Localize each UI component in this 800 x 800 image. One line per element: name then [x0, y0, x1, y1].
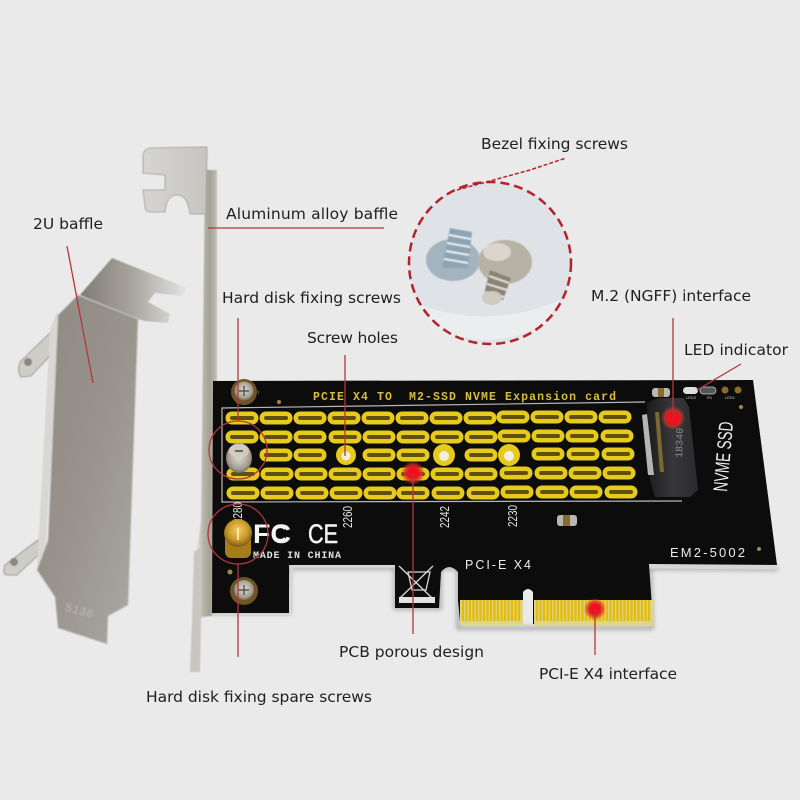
- M.2 connector: 18340: [675, 428, 687, 458]
- recycling icon: [399, 566, 435, 603]
- callout rings: [208, 421, 268, 564]
- board labels: NVME SSD: [710, 421, 738, 492]
- size markings: [230, 502, 520, 528]
- label: Hard disk fixing screws: Hard disk fixing screws: [222, 289, 401, 307]
- label: M.2 (NGFF) interface: M.2 (NGFF) interface: [591, 287, 751, 305]
- vertical bar: [197, 170, 217, 618]
- zoomed bezel fixing screws circle: [409, 158, 571, 344]
- size markings: 2242: [437, 506, 452, 528]
- size markings: 2230: [505, 505, 520, 527]
- board edge highlight: [212, 566, 776, 615]
- certification marks: MADE IN CHINA: [253, 551, 341, 562]
- capacitors: [557, 388, 670, 526]
- label: Screw holes: Screw holes: [307, 329, 398, 347]
- LED components: [228, 386, 761, 574]
- label: Aluminum alloy baffle: Aluminum alloy baffle: [226, 205, 398, 223]
- board labels: LED2: [686, 395, 697, 400]
- board labels: [250, 390, 745, 589]
- dashed red ring: [409, 182, 571, 344]
- PCIe M.2 adapter board: [212, 379, 778, 628]
- circle backdrop: [409, 182, 571, 344]
- label: LED indicator: LED indicator: [684, 341, 789, 359]
- certification marks: FC: [253, 519, 291, 549]
- silver screw: [478, 240, 532, 305]
- bracket body: [37, 295, 138, 644]
- board labels: U48: [250, 584, 258, 589]
- M.2 connector: [642, 398, 698, 497]
- aluminum alloy baffle bracket: [143, 147, 217, 672]
- board labels: LED1: [725, 395, 736, 400]
- label: PCB porous design: PCB porous design: [339, 643, 484, 661]
- gold standoff: [224, 519, 252, 558]
- dashed leader: [457, 158, 566, 190]
- board labels: EM2-5002: [670, 545, 745, 560]
- bracket top flap: [80, 258, 187, 323]
- left gold fingers: [460, 600, 523, 625]
- lower mounting tab: [4, 540, 46, 575]
- certification marks: [253, 519, 341, 562]
- board labels: R1: [707, 395, 713, 400]
- 2U baffle bracket: [4, 258, 187, 644]
- label: PCI-E X4 interface: PCI-E X4 interface: [539, 665, 677, 683]
- board shadow: [212, 568, 778, 628]
- blue-zinc screw: [426, 228, 480, 281]
- lower tip: [190, 546, 202, 672]
- title printed on board: PCIE X4 TO M2-SSD NVME Expansion card: [313, 391, 616, 404]
- solder area outline: [222, 402, 682, 502]
- porous pad grid: [226, 410, 638, 500]
- upper mounting tab: [19, 326, 57, 377]
- size markings: 2280: [230, 502, 245, 524]
- label: Hard disk fixing spare screws: Hard disk fixing spare screws: [146, 688, 372, 706]
- flange: [143, 147, 207, 214]
- side rail: [37, 312, 60, 570]
- label: Bezel fixing screws: Bezel fixing screws: [481, 135, 628, 153]
- bottom screw: [230, 577, 258, 605]
- board labels: U47: [252, 390, 260, 395]
- stamped code: S136: [63, 601, 95, 621]
- red glow markers: [401, 406, 685, 620]
- top screw: [231, 379, 257, 405]
- screw holes: [336, 444, 520, 466]
- label: 2U baffle: 2U baffle: [33, 215, 103, 233]
- size markings: 2260: [340, 506, 355, 528]
- certification marks: CE: [308, 519, 338, 549]
- PCB: [212, 380, 777, 624]
- leader lines: [67, 228, 741, 657]
- board labels: PCI-E X4: [465, 558, 531, 572]
- middle silver screw: [226, 443, 252, 473]
- right gold fingers: [534, 600, 653, 626]
